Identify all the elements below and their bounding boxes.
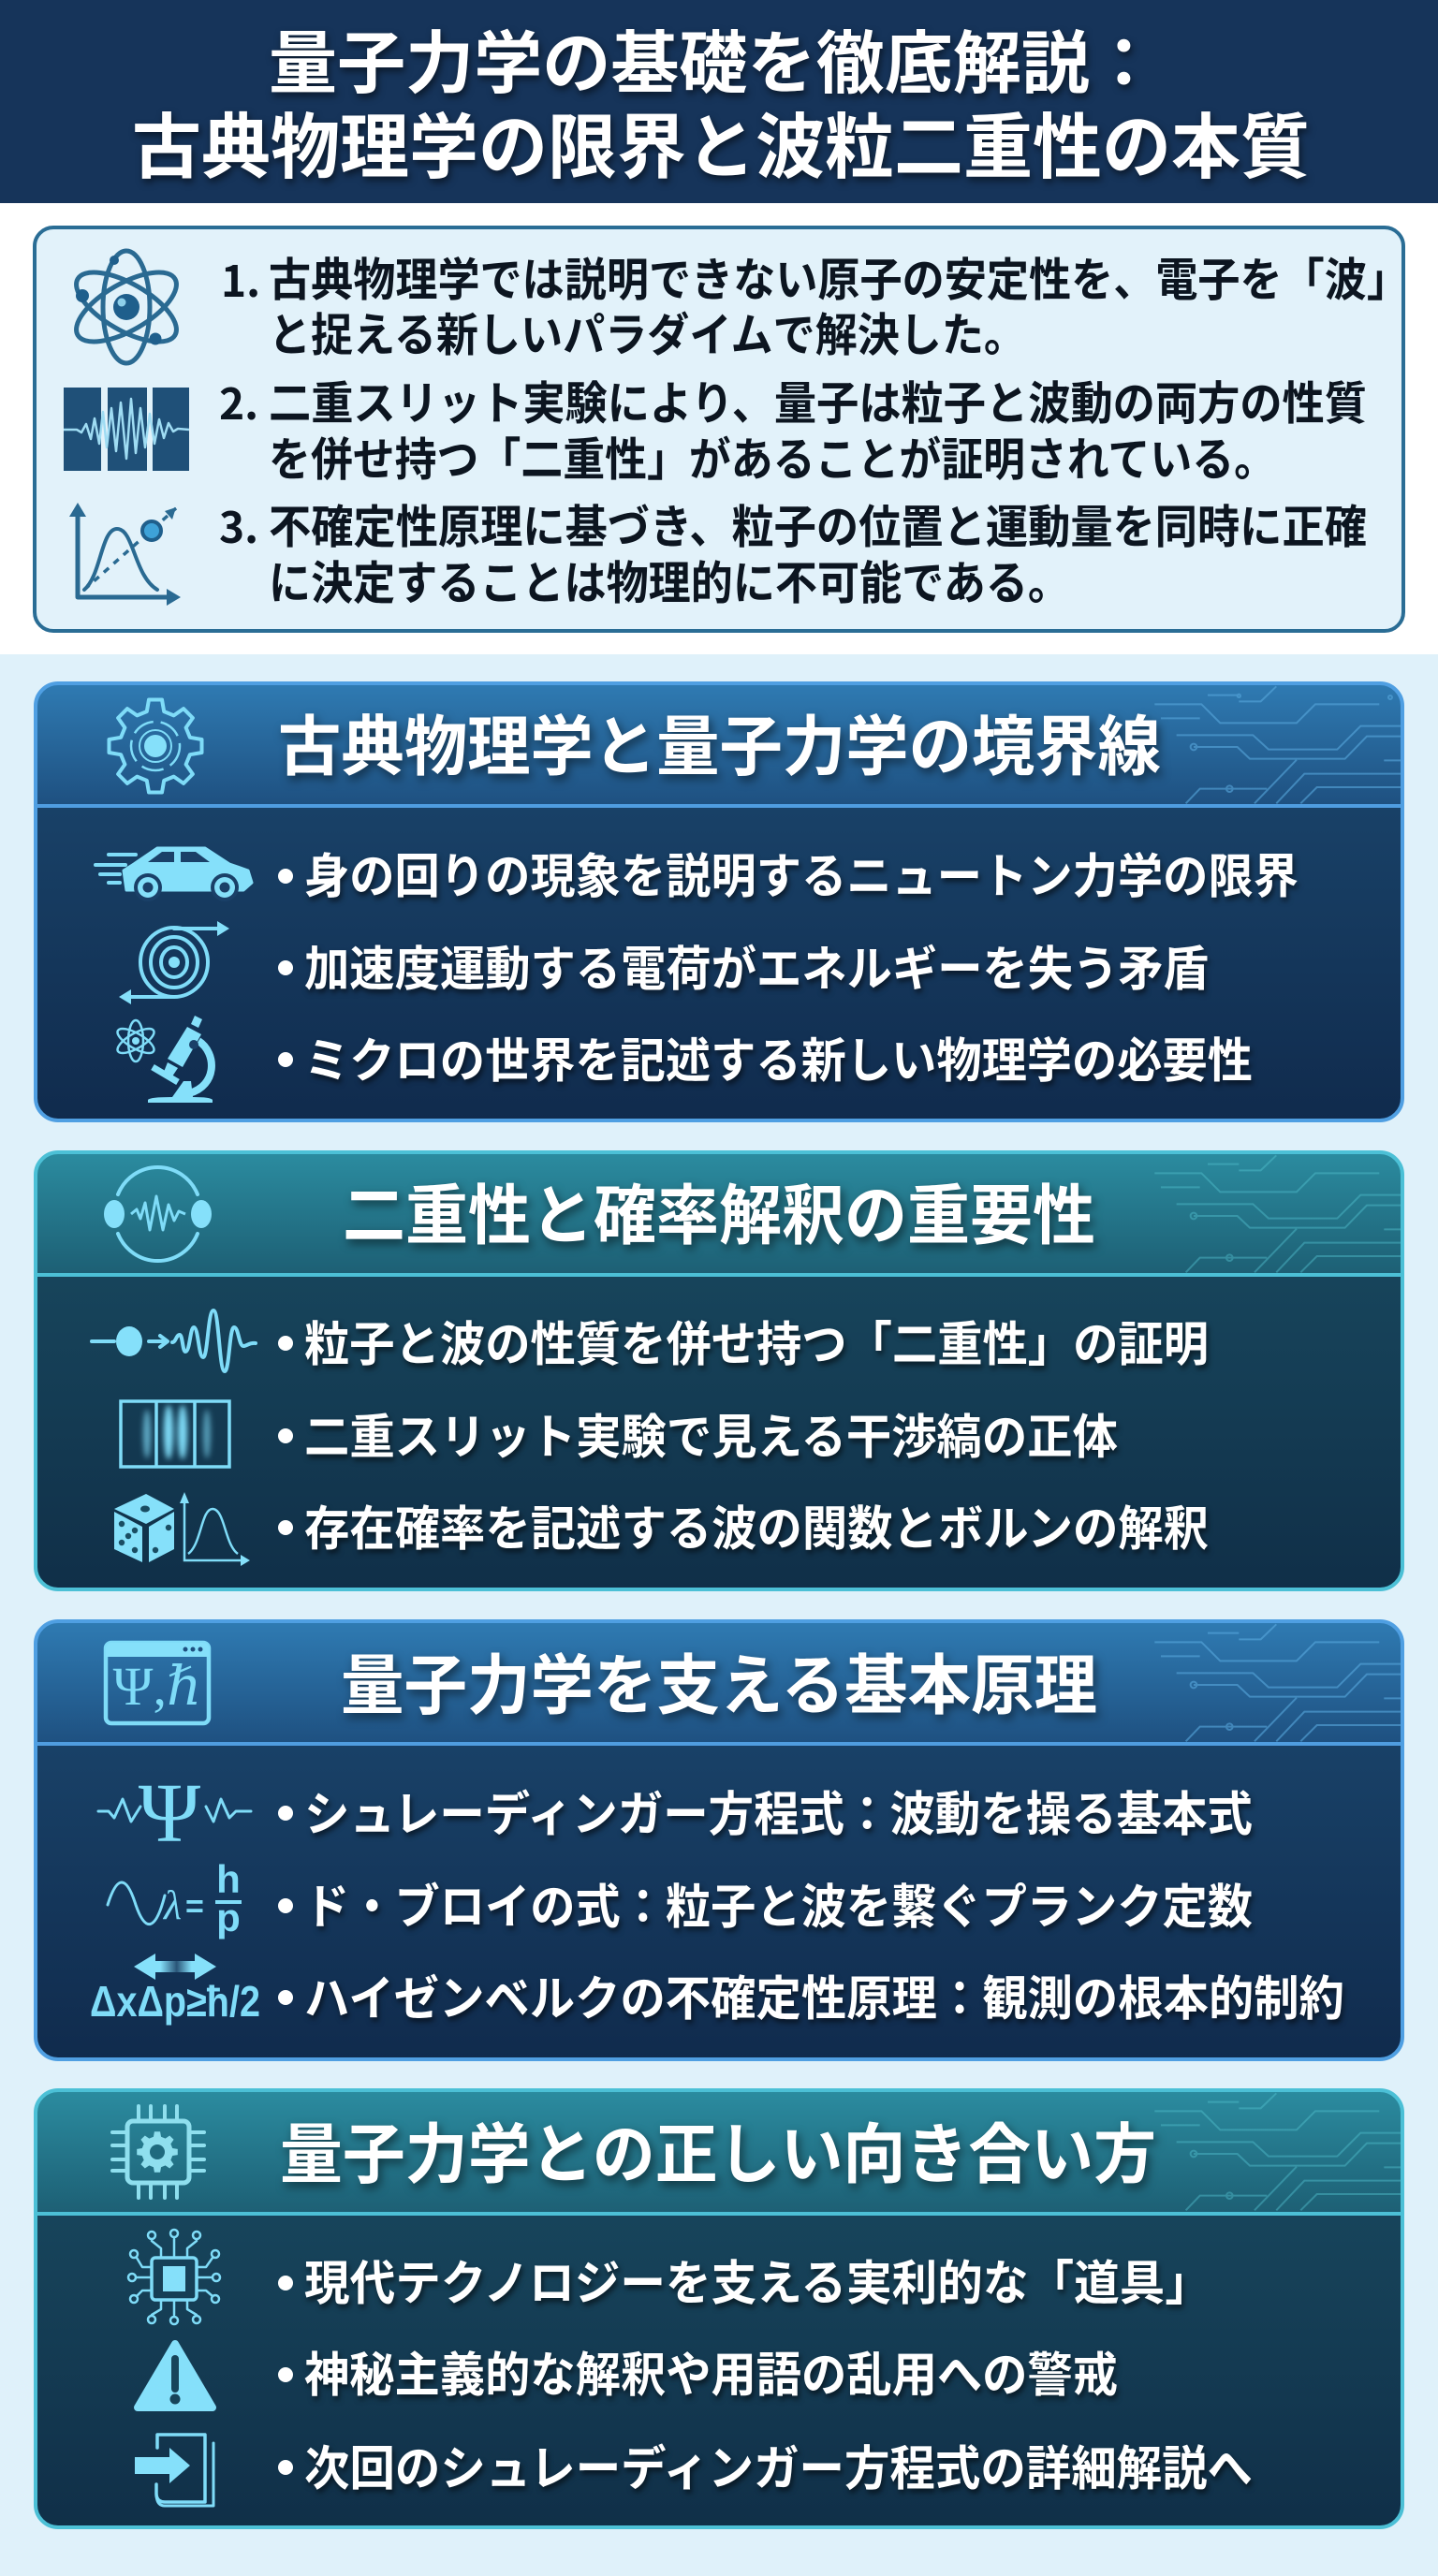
bullet list [278,1318,1209,1556]
panel: right approach [36,2090,1402,2527]
heading: 古典物理学と量子力学の境界線 [278,710,1161,783]
heading: 量子力学との正しい向き合い方 [280,2118,1156,2191]
icon: spiral energy loss [119,921,229,1004]
icon: de Broglie formula [108,1857,242,1939]
bullet list: 存在確率を記述する波の関数とボルンの解釈 [304,1502,1209,1556]
icon: formula window [106,1643,209,1723]
bullet list: 加速度運動する電荷がエネルギーを失う矛盾 [304,943,1209,996]
panel: duality [36,1152,1402,1589]
icon: uncertainty relation: ΔxΔp≥ħ/2 [90,1977,260,2026]
bullet list [278,1788,1344,2026]
icon: circuit chip [128,2230,220,2324]
panel: classical vs quantum [36,683,1402,1120]
panel: principles [36,1621,1402,2059]
bullet list: 身の回りの現象を説明するニュートン力学の限界 [304,850,1299,903]
icon: warning triangle [138,2344,213,2408]
title: 古典物理学の限界と波粒二重性の本質 [132,109,1310,188]
icon: de Broglie formula: h [216,1857,241,1901]
icon: gear with orbit [109,700,202,792]
bullet list: 粒子と波の性質を併せ持つ「二重性」の証明 [304,1318,1209,1371]
heading: 量子力学を支える基本原理 [341,1649,1097,1722]
bullet list: 二重スリット実験で見える干渉縞の正体 [304,1411,1118,1464]
icon: de Broglie formula: = [185,1889,204,1925]
bullet list: 神秘主義的な解釈や用語の乱用への警戒 [304,2349,1118,2402]
icon: de Broglie formula: λ [162,1882,182,1928]
summary points: と捉える新しいパラダイムで解決した。 [269,311,1026,361]
title: 量子力学の基礎を徹底解説： [269,26,1158,102]
bullet list [278,850,1299,1088]
summary points: 1. [221,248,260,310]
bullet list: ド・ブロイの式：粒子と波を繋ぐプランク定数 [304,1881,1253,1934]
summary points: 3. [219,494,258,556]
icon: particle to wave [92,1310,256,1371]
bullet list: ハイゼンベルクの不確定性原理：観測の根本的制約 [304,1972,1344,2026]
icon: dice and distribution [114,1492,250,1566]
title banner [0,0,1438,203]
icon: chip with gear [112,2106,204,2198]
bullet list: シュレーディンガー方程式：波動を操る基本式 [304,1788,1253,1841]
icon: double slit wave [64,388,189,471]
icon: psi wave: Ψ [139,1767,201,1860]
summary points: 二重スリット実験により、量子は粒子と波動の両方の性質 [269,379,1367,430]
icon: microscope and atom [114,1016,213,1103]
icon: interference fringes [121,1401,229,1467]
summary points [219,248,1409,609]
heading: 二重性と確率解釈の重要性 [343,1179,1095,1252]
icon: formula window: Ψ,ℏ [113,1656,201,1717]
icon: car [95,848,252,901]
icon: de Broglie formula: p [216,1895,241,1939]
summary points: に決定することは物理的に不可能である。 [269,559,1070,609]
icon: uncertainty relation [90,1954,260,2026]
bullet list: 現代テクノロジーを支える実利的な「道具」 [304,2257,1211,2310]
icon: atom [66,251,186,363]
bullet list: 次回のシュレーディンガー方程式の詳細解説へ [304,2442,1253,2496]
summary points: を併せ持つ「二重性」があることが証明されている。 [269,435,1276,486]
bullet list [278,2257,1253,2496]
summary points: 2. [219,371,258,432]
icon: psi wave [98,1767,251,1860]
icon: uncertainty graph [69,503,181,606]
icon: next arrow document [135,2435,213,2506]
panel: summary [35,227,1409,631]
summary points: 不確定性原理に基づき、粒子の位置と運動量を同時に正確 [269,503,1367,553]
icon: wave particle circle [104,1167,212,1261]
bullet list: ミクロの世界を記述する新しい物理学の必要性 [304,1034,1253,1088]
title [132,26,1310,188]
